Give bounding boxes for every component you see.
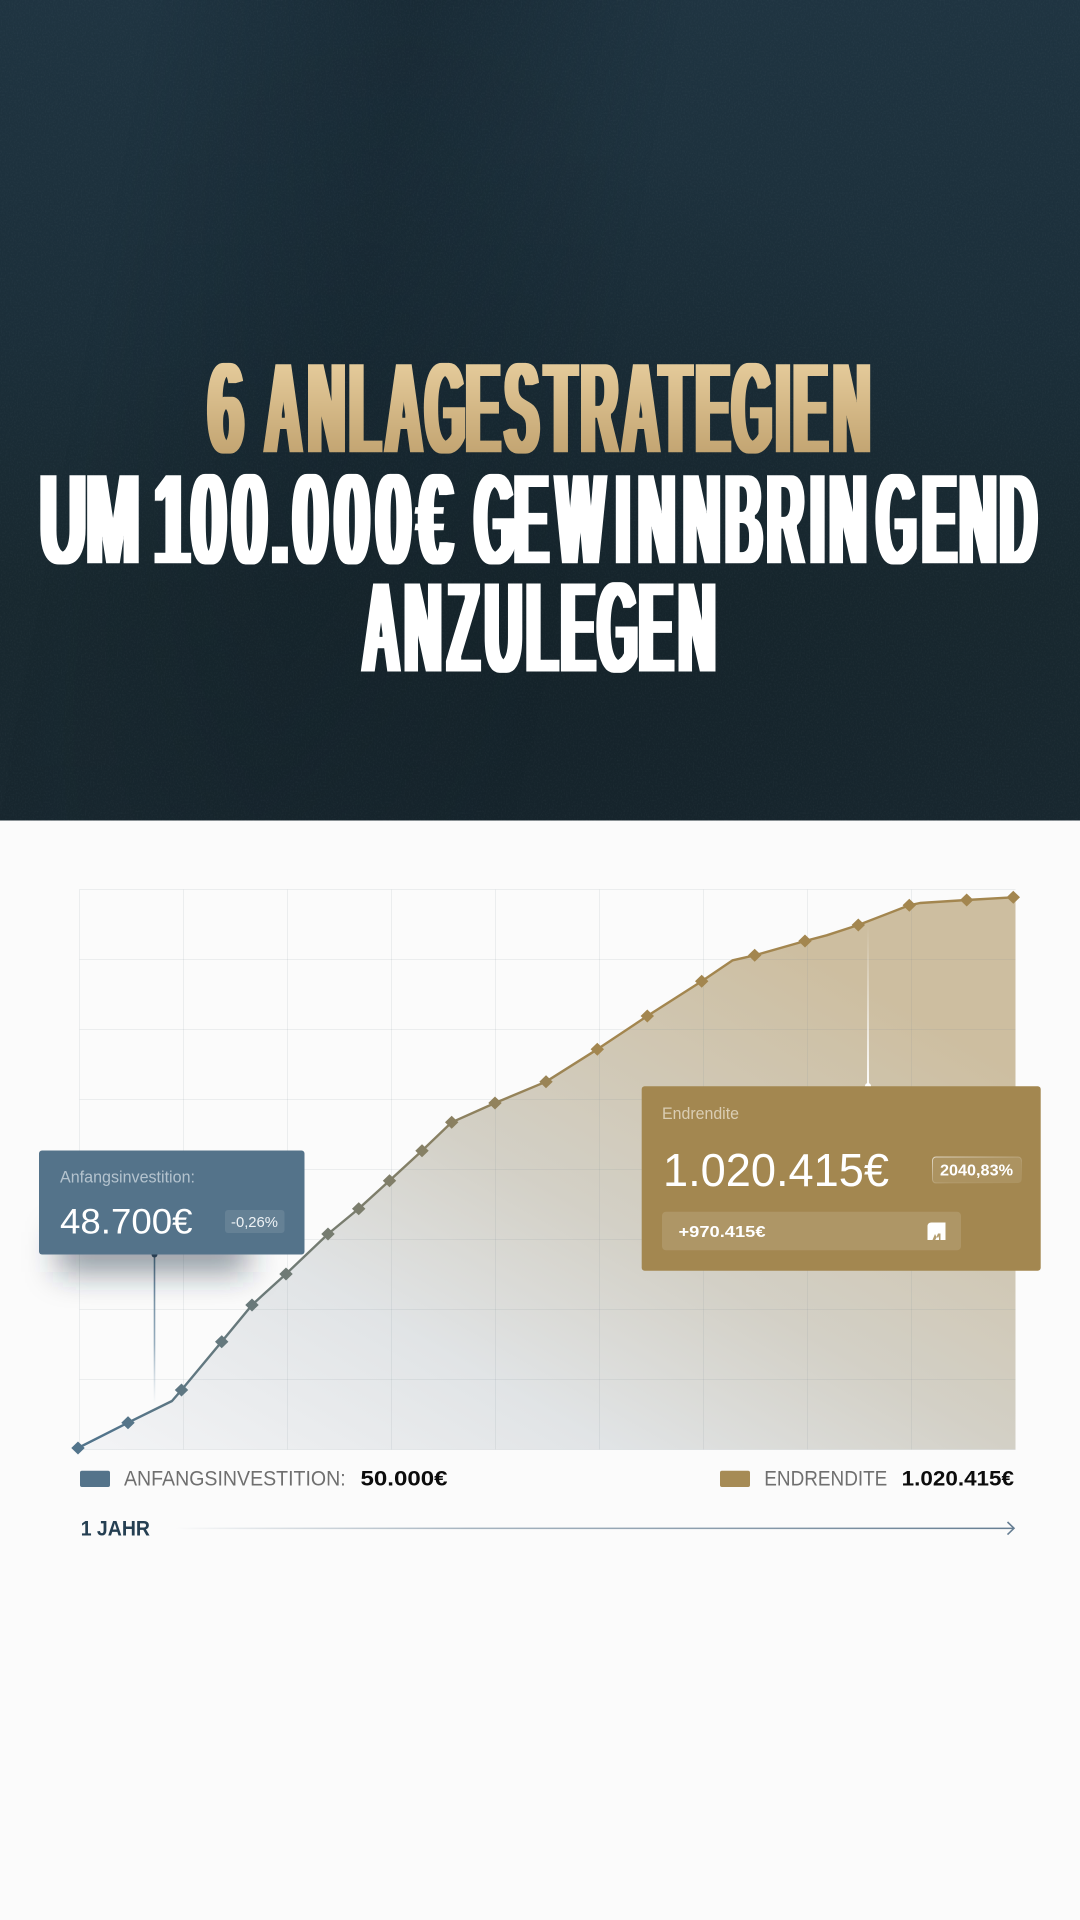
title line 2: white: 100.000€ bbox=[154, 446, 453, 594]
time axis label: 1 JAHR bbox=[81, 1518, 150, 1541]
callout value: 48.700€ bbox=[60, 1202, 192, 1241]
title line 1: gold: 6 bbox=[208, 335, 244, 483]
icon: chart badge bbox=[928, 1222, 946, 1240]
legend label: ANFANGSINVESTITION: bbox=[124, 1468, 346, 1491]
callout: Endrendite bbox=[642, 1086, 1041, 1271]
callout gain row: +970.415€ bbox=[678, 1224, 766, 1241]
title line 2: white: UM bbox=[40, 446, 140, 594]
legend: final return bbox=[720, 1468, 1014, 1491]
legend label: ENDRENDITE bbox=[764, 1468, 887, 1491]
legend value: 1.020.415€ bbox=[902, 1468, 1014, 1491]
title line 3: white: ANZULEGEN bbox=[363, 554, 715, 702]
callout gain row bbox=[662, 1212, 961, 1250]
chart markers bbox=[72, 892, 1019, 1454]
callout label: Endrendite bbox=[662, 1105, 739, 1123]
callout pin: initial investment bbox=[152, 1252, 158, 1404]
title bbox=[40, 335, 1037, 702]
legend swatch bbox=[720, 1471, 750, 1487]
chart bbox=[72, 890, 1019, 1454]
callout percentage badge: 2040,83% bbox=[940, 1162, 1013, 1179]
chart area fill bbox=[80, 897, 1016, 1450]
header panel bbox=[0, 0, 1080, 820]
title line 2: white: GEWINNBRINGEND bbox=[475, 446, 1037, 594]
legend swatch bbox=[80, 1471, 110, 1487]
callout: Anfangsinvestition bbox=[39, 1150, 304, 1272]
legend value: 50.000€ bbox=[360, 1468, 448, 1491]
callout change badge bbox=[225, 1210, 284, 1233]
callout pin: final return bbox=[865, 925, 871, 1089]
callout label: Anfangsinvestition: bbox=[60, 1169, 195, 1187]
chart line bbox=[78, 897, 1013, 1448]
callout change badge: -0,26% bbox=[231, 1214, 278, 1231]
title line 1: gold: ANLAGESTRATEGIEN bbox=[265, 335, 870, 483]
title line 2: white bbox=[40, 446, 1037, 594]
arrow: time axis bbox=[175, 1522, 1014, 1535]
callout value: 1.020.415€ bbox=[663, 1144, 889, 1196]
callout percentage badge bbox=[932, 1157, 1022, 1183]
legend: initial investment bbox=[80, 1468, 448, 1491]
